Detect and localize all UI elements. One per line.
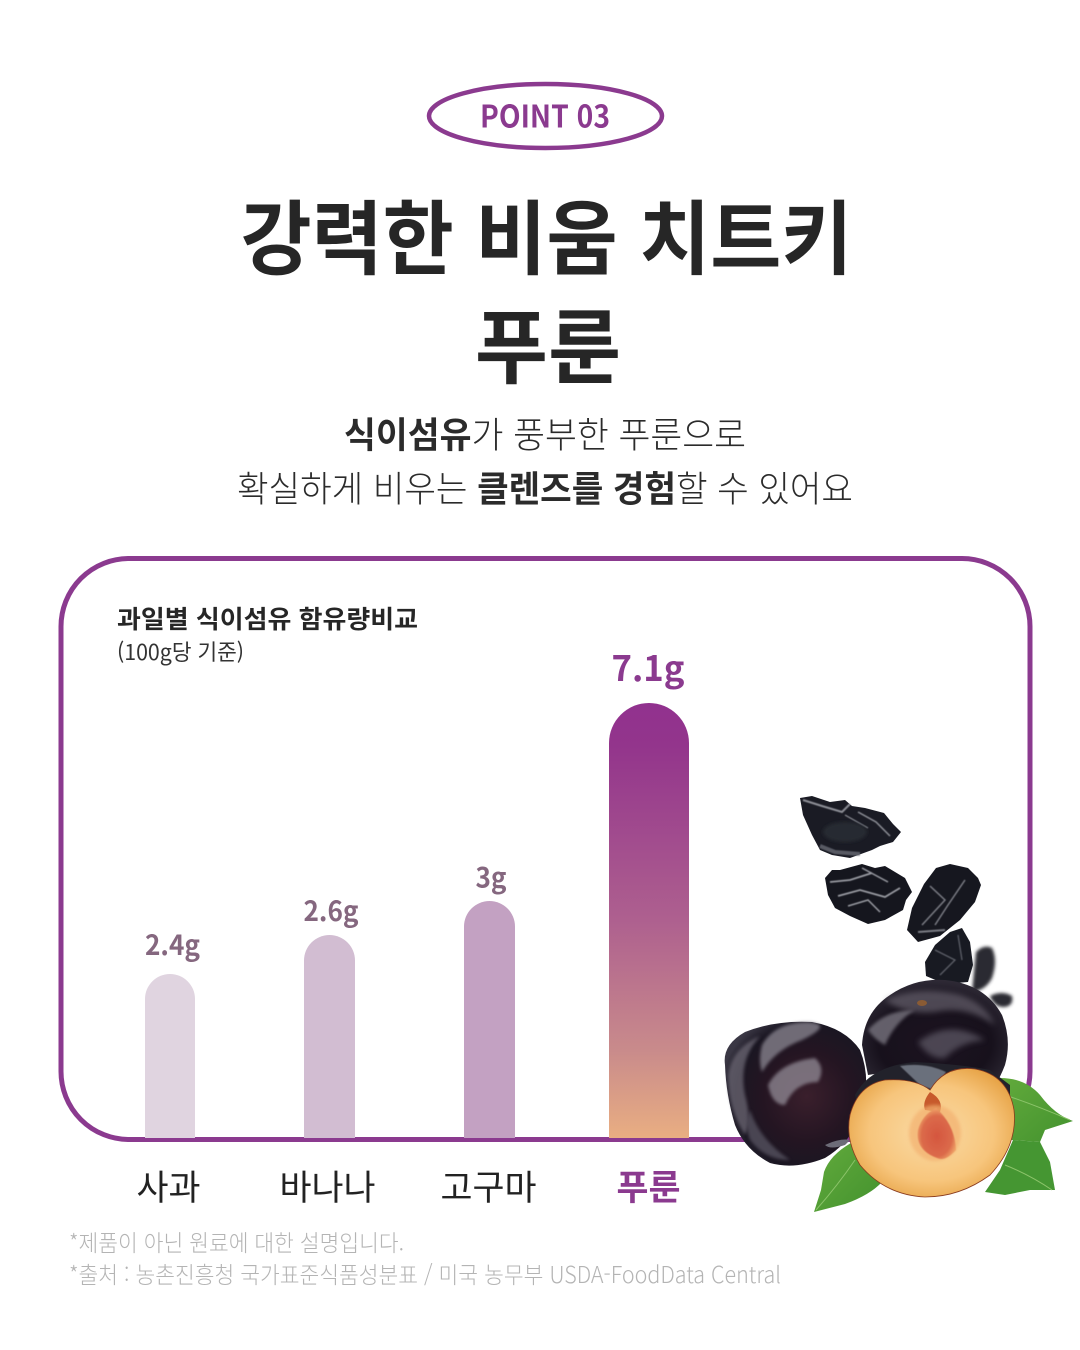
footnotes: *제품이 아닌 원료에 대한 설명입니다. — [69, 1224, 404, 1258]
bar: banana 2.6g — [304, 890, 359, 1138]
chart heading — [117, 600, 418, 667]
bar: banana 2.6g: 2.6g — [304, 890, 359, 930]
chart heading: (100g당 기준) — [117, 635, 244, 667]
category labels: 푸룬 — [616, 1160, 680, 1211]
bar chart — [145, 641, 689, 1138]
bar: prune 7.1g — [609, 641, 689, 1138]
icon: dried prune middle right — [907, 864, 981, 942]
bar: sweet potato 3g — [464, 856, 515, 1138]
subtitle text: 식이섬유가 풍부한 푸룬으로 — [344, 406, 746, 458]
bar: apple 2.4g — [145, 924, 200, 1138]
panel: chart frame — [61, 558, 1030, 1140]
title — [240, 175, 852, 401]
icon: halved plum — [849, 1062, 1014, 1197]
illustration: prunes and plums — [725, 796, 1073, 1212]
icon: whole plum left — [725, 1022, 866, 1166]
category labels — [136, 1160, 680, 1211]
icon: dried prune lower — [925, 928, 973, 984]
category labels: 사과 — [136, 1160, 200, 1211]
icon: dried prune middle left — [825, 864, 912, 924]
bar: sweet potato 3g: 3g — [476, 856, 507, 896]
icon: leaf left — [814, 1143, 882, 1212]
title: 강력한 비움 치트키 — [240, 175, 852, 292]
badge: POINT 03: POINT 03 — [480, 92, 610, 136]
icon: dried prune top — [800, 796, 901, 858]
icon: blurred dried prunes — [972, 947, 1012, 1007]
badge: POINT 03 — [429, 84, 662, 148]
footnotes: *출처 : 농촌진흥청 국가표준식품성분표 / 미국 농무부 USDA-FoodData Central — [69, 1256, 781, 1290]
bar: prune 7.1g: 7.1g — [612, 641, 685, 692]
title: 푸룬 — [475, 284, 621, 401]
footnotes — [69, 1224, 781, 1290]
bar: apple 2.4g: 2.4g — [145, 924, 200, 964]
category labels: 바나나 — [280, 1160, 376, 1211]
category labels: 고구마 — [440, 1160, 536, 1211]
subtitle text — [237, 406, 853, 512]
subtitle text: 확실하게 비우는 클렌즈를 경험할 수 있어요 — [237, 460, 853, 512]
chart heading: 과일별 식이섬유 함유량비교 — [117, 600, 418, 636]
icon: whole plum back — [862, 980, 1008, 1085]
icon: leaves right — [985, 1078, 1073, 1195]
